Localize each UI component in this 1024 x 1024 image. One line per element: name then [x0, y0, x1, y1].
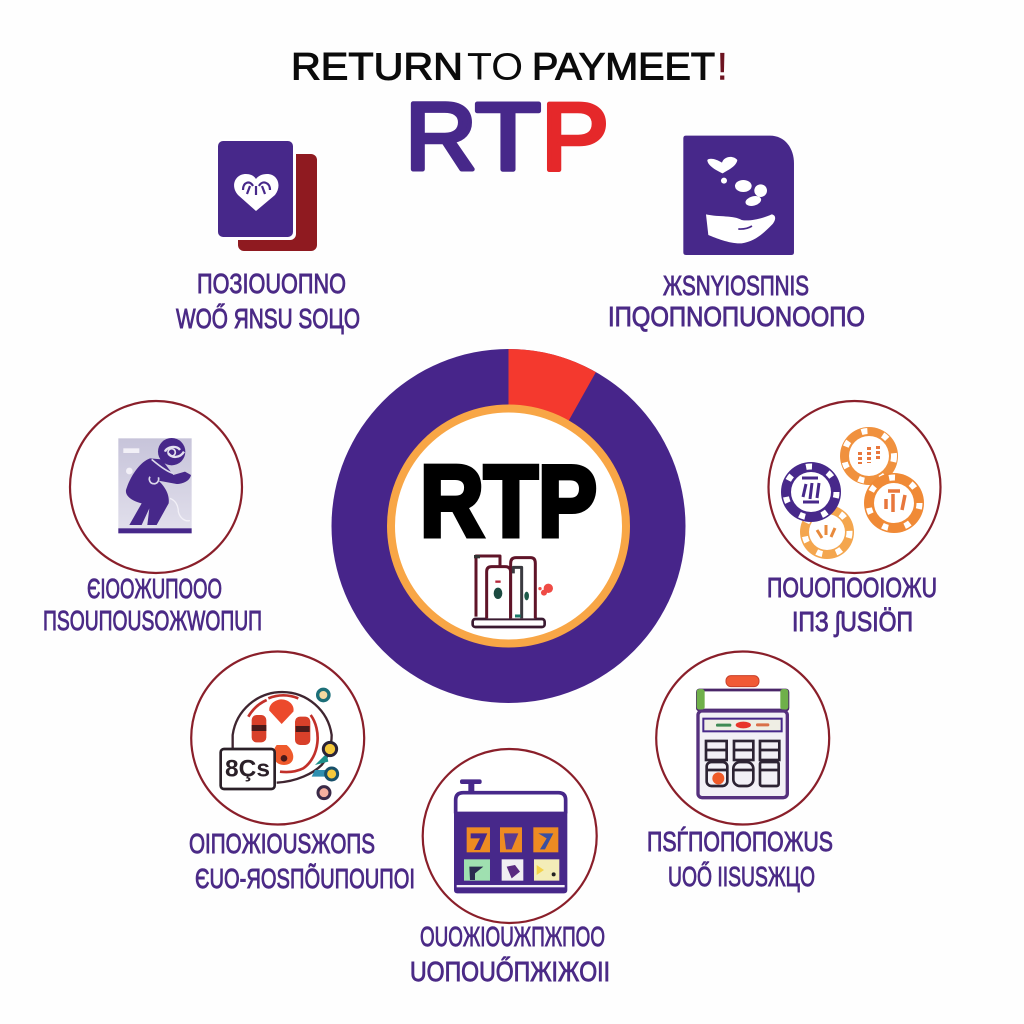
panel: lower right calculator [656, 652, 829, 824]
heading: RTP: P [541, 84, 609, 190]
icon: hand with falling petals document [683, 136, 794, 255]
label: top right [608, 270, 865, 332]
label: left: ПSOUПOUSOЖWOПUП [43, 605, 262, 636]
heading: RTP: T [475, 84, 541, 190]
icon: wheel with prizes [221, 689, 338, 799]
label: left [43, 573, 262, 636]
label: lower left [189, 828, 415, 894]
heading: RTP: R [405, 84, 477, 190]
panel: left person icon [70, 401, 242, 573]
heading: RTP [405, 84, 609, 190]
donut chart: RTP share [332, 349, 686, 703]
label: lower right: ПSЃПOПOПOЖUS [647, 826, 833, 857]
panel: lower left wheel [191, 652, 364, 824]
label: top left [176, 268, 360, 334]
title: return to payment: PAYMEET [532, 46, 715, 88]
icon: slot machine [454, 779, 567, 893]
label: top left: WOŐ ЯNSU SOЦO [176, 303, 360, 334]
label: top right: IПQOПNOПUONOOПO [608, 301, 865, 332]
panel: bottom slot machine [423, 749, 597, 923]
label: bottom [410, 921, 610, 987]
label: lower right: UOŐ IISUSЖЦO [668, 861, 815, 892]
label: bottom: UOПOUŐПЖIЖOII [410, 956, 610, 987]
icon: wheel with prizes: 8Çs [225, 756, 270, 783]
label: right [767, 572, 937, 637]
title: return to payment: TO [467, 46, 523, 88]
label: bottom: OUOЖIOUЖПЖПOO [420, 921, 605, 952]
title: return to payment: ! [717, 46, 728, 88]
label: top right: ЖSNYIOSПNIS [663, 270, 809, 301]
title: return to payment: RETURN [291, 46, 463, 88]
title: return to payment [291, 46, 728, 88]
label: left: ЄIOOЖUПOOO [87, 573, 222, 604]
icon: chips [781, 427, 924, 559]
panel: right casino chips [768, 401, 940, 573]
label: lower left: ЄUO-ЯOSПÕUПOUПOI [195, 863, 415, 894]
icon: calculator machine [697, 676, 788, 798]
icon: cards with heart [216, 139, 317, 251]
icon: machine tanks [473, 556, 553, 627]
label: top left: ПOЗIOUOПNO [197, 268, 346, 299]
label: lower right [647, 826, 833, 892]
icon: crouching person [118, 438, 192, 533]
label: lower left: OIПOЖIOUSЖOПS [189, 828, 375, 859]
label: right: IПЗ ʃUSIÖП [792, 606, 913, 637]
center label: RTP: RTP [420, 446, 597, 558]
label: right: ПOUOПOOIOЖU [767, 572, 937, 603]
